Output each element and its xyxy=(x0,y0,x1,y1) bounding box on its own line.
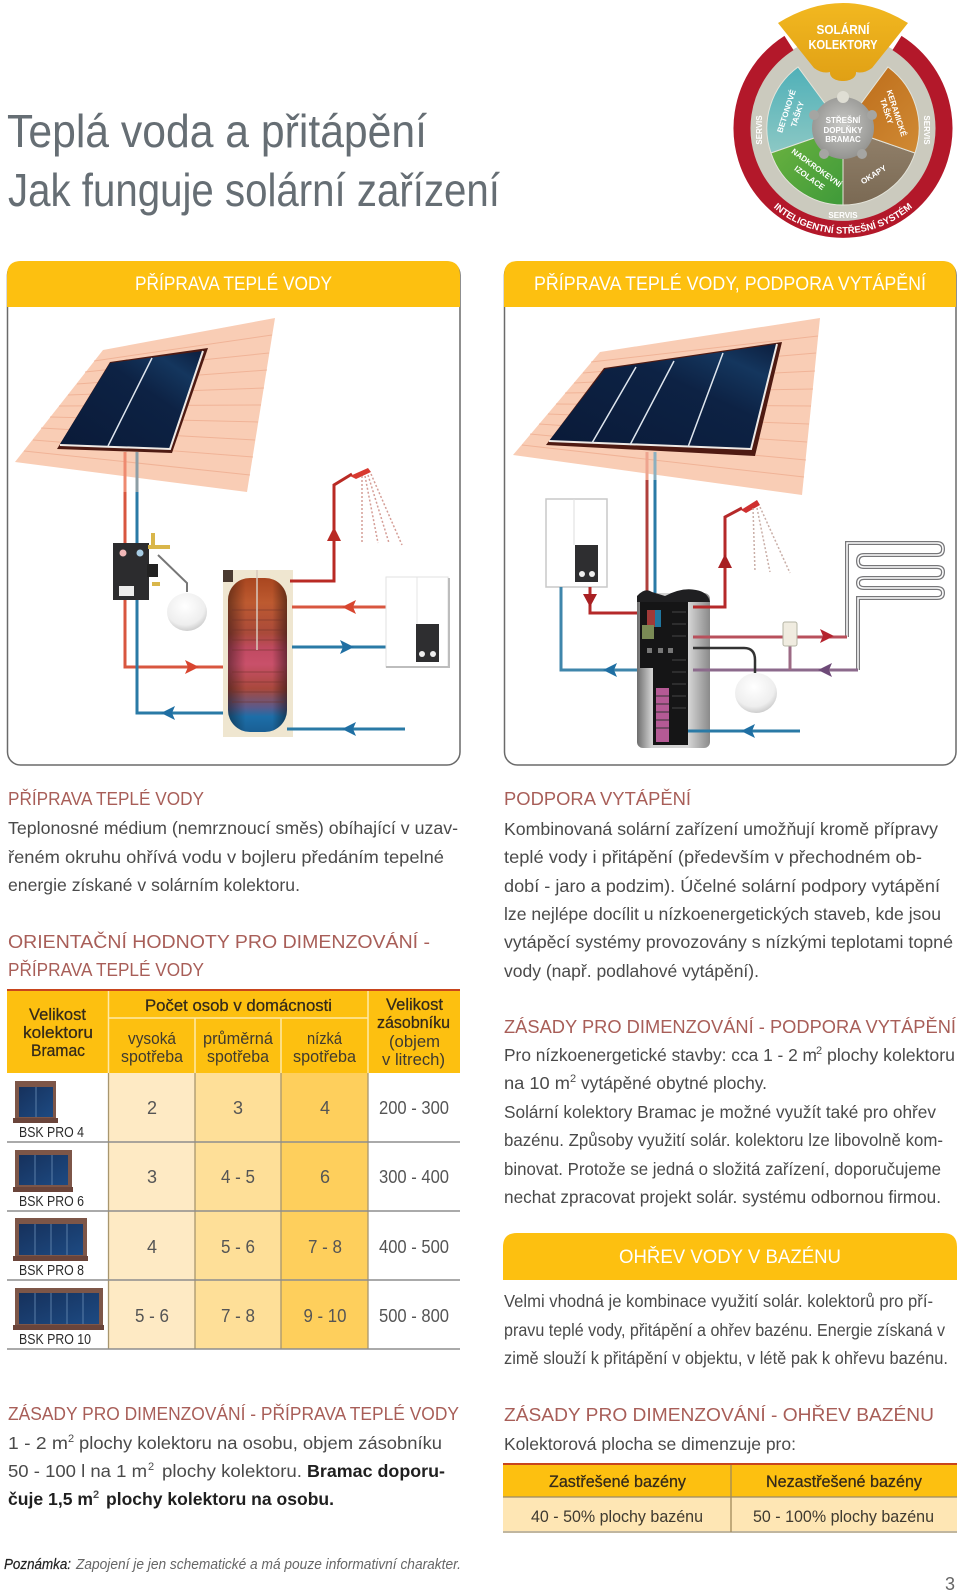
boiler connection pipes xyxy=(287,600,405,736)
banner: ohřev vody v bazénu xyxy=(503,1233,957,1280)
shower pipe and head xyxy=(693,500,790,607)
text block: příprava teplé vody: Teplonosné médium (nemrznoucí směs) obíhající v uzav- xyxy=(8,818,458,838)
row: BSK PRO 6: BSK PRO 6 xyxy=(19,1194,84,1210)
table header: kolektoru xyxy=(23,1024,93,1042)
table header: spotřeba xyxy=(207,1048,270,1066)
wall boiler xyxy=(386,577,449,667)
text block: zásady podpora vytápění: Solární kolektory Bramac je možné využít také pro ohřev xyxy=(504,1102,936,1122)
table column fills xyxy=(7,1073,460,1349)
text block: podpora vytápění: PODPORA VYTÁPĚNÍ xyxy=(504,789,691,809)
table header: nízká xyxy=(307,1030,343,1048)
row: BSK PRO 8 xyxy=(13,1218,449,1279)
table header xyxy=(7,989,460,1073)
table header: vysoká xyxy=(128,1030,177,1048)
text block: zásady příprava teplé vody: 2 xyxy=(148,1461,154,1473)
text block: příprava teplé vody: energie získané v solárním kolektoru. xyxy=(8,875,300,895)
combined tank xyxy=(637,589,710,748)
arrow: return from tank xyxy=(161,706,175,720)
table header: v litrech) xyxy=(382,1051,445,1069)
text block: příprava teplé vody: řeném okruhu ohřívá vodu v bojleru předáním tepelné xyxy=(8,847,444,867)
expansion vessel xyxy=(158,555,207,631)
emblem: intelligent roof system wheel xyxy=(733,3,953,238)
text block: zásady příprava teplé vody: 2 xyxy=(68,1433,74,1445)
sector: keramické tašky: KERAMICKÉ xyxy=(885,89,908,138)
title xyxy=(7,105,500,216)
text block: zásady podpora vytápění: 2 xyxy=(570,1073,576,1085)
text block: příprava teplé vody xyxy=(8,789,458,895)
roof with collector xyxy=(513,318,820,495)
panel heading: PŘÍPRAVA TEPLÉ VODY, PODPORA VYTÁPĚNÍ xyxy=(534,273,927,295)
text block: příprava teplé vody: PŘÍPRAVA TEPLÉ VODY xyxy=(8,789,204,809)
table header: spotřeba xyxy=(293,1048,357,1066)
note: Zapojení je jen schematické a má pouze informativní charakter. xyxy=(75,1556,461,1573)
heading: orientační hodnoty: ORIENTAČNÍ HODNOTY PRO DIMENZOVÁNÍ - xyxy=(8,931,430,952)
sector: keramické tašky: TAŠKY xyxy=(878,97,895,126)
row: BSK PRO 10: 7 - 8 xyxy=(221,1306,255,1326)
table header: Počet osob v domácnosti xyxy=(145,997,332,1015)
roof with collector xyxy=(15,318,275,492)
row: BSK PRO 4: 200 - 300 xyxy=(379,1098,449,1118)
row: BSK PRO 6: 6 xyxy=(320,1167,330,1187)
row: BSK PRO 4: 2 xyxy=(147,1098,157,1118)
yellow piece: solární kolektory: SOLÁRNÍ xyxy=(816,22,870,37)
panel heading xyxy=(504,261,956,307)
text block: zásady podpora vytápění: 2 xyxy=(816,1045,822,1057)
row: BSK PRO 8: 4 xyxy=(147,1237,157,1257)
sector: betonové tašky xyxy=(767,67,843,153)
row: BSK PRO 6: 4 - 5 xyxy=(221,1167,255,1187)
text block: zásady příprava teplé vody xyxy=(8,1404,459,1509)
shower pipe and head xyxy=(290,468,402,581)
cold water inlet xyxy=(688,724,800,738)
text block: zásady příprava teplé vody: Bramac doporu- xyxy=(307,1461,445,1481)
sector: nadkrokevní izolace: NADKROKEVNÍ xyxy=(790,147,844,190)
row: BSK PRO 10 xyxy=(13,1288,449,1348)
text block: zásady příprava teplé vody: 2 xyxy=(93,1489,99,1501)
text block: zásady příprava teplé vody: 1 - 2 m xyxy=(8,1433,68,1453)
text block: ohřev bazénu: Velmi vhodná je kombinace využití solár. kolektorů pro pří- xyxy=(504,1291,933,1311)
row: BSK PRO 8: 400 - 500 xyxy=(379,1237,449,1257)
text block: zásady příprava teplé vody: čuje 1,5 m xyxy=(8,1489,93,1509)
panel heading xyxy=(7,261,460,307)
table header: spotřeba xyxy=(121,1048,184,1066)
boiler pipes xyxy=(561,587,640,677)
row: BSK PRO 10: BSK PRO 10 xyxy=(19,1332,91,1348)
table header: průměrná xyxy=(203,1030,274,1048)
sector: okapy xyxy=(843,128,915,205)
heading: orientační hodnoty: PŘÍPRAVA TEPLÉ VODY xyxy=(8,960,204,980)
central puzzle: střešní doplňky: DOPLŇKY xyxy=(823,126,863,135)
text block: zásady podpora vytápění xyxy=(504,1017,956,1207)
row: BSK PRO 10: 9 - 10 xyxy=(304,1306,346,1326)
service labels: SERVIS xyxy=(755,115,764,145)
text block: zásady příprava teplé vody: plochy kolektoru na osobu, objem zásobníku xyxy=(79,1433,442,1453)
storage tank xyxy=(223,570,293,737)
table header: Bramac xyxy=(31,1042,85,1060)
solar circuit pipes xyxy=(647,452,655,630)
sector: nadkrokevní izolace: IZOLACE xyxy=(793,164,827,192)
table: bazény xyxy=(503,1463,957,1532)
central puzzle: střešní doplňky xyxy=(809,91,877,159)
table header: Velikost xyxy=(29,1006,86,1024)
sector: betonové tašky: TAŠKY xyxy=(789,100,806,128)
service labels: SERVIS xyxy=(828,211,858,220)
text block: podpora vytápění: vytápěcí systémy provozovány s nízkými teplotami topné xyxy=(504,932,953,952)
text block: podpora vytápění xyxy=(504,789,953,981)
text block: zásady ohřev bazénu: ZÁSADY PRO DIMENZOVÁNÍ - OHŘEV BAZÉNU xyxy=(504,1405,934,1425)
sector: betonové tašky: BETONOVÉ xyxy=(775,88,798,134)
banner: ohřev vody v bazénu: OHŘEV VODY V BAZÉNU xyxy=(619,1246,841,1268)
table header: zásobníku xyxy=(377,1014,450,1032)
yellow piece: solární kolektory: KOLEKTORY xyxy=(808,38,878,52)
row: BSK PRO 10: 500 - 800 xyxy=(379,1306,449,1326)
row: BSK PRO 4: 3 xyxy=(233,1098,243,1118)
row: BSK PRO 8: BSK PRO 8 xyxy=(19,1263,84,1279)
row: BSK PRO 8: 5 - 6 xyxy=(221,1237,255,1257)
panel: příprava teplé vody, podpora vytápění xyxy=(504,261,956,765)
row: BSK PRO 8: 7 - 8 xyxy=(308,1237,342,1257)
row: BSK PRO 6 xyxy=(13,1150,449,1210)
table: dimenzování xyxy=(7,989,460,1349)
text block: zásady ohřev bazénu: Kolektorová plocha se dimenzuje pro: xyxy=(504,1434,796,1454)
sector: okapy: OKAPY xyxy=(859,163,889,186)
central puzzle: střešní doplňky: STŘEŠNÍ xyxy=(826,116,861,125)
table header: Velikost xyxy=(386,996,443,1014)
solar circuit pipes xyxy=(125,452,227,713)
table: bazény: Zastřešené bazény xyxy=(549,1473,687,1491)
row: BSK PRO 10: 5 - 6 xyxy=(135,1306,169,1326)
text block: podpora vytápění: vody (např. podlahové vytápění). xyxy=(504,961,759,981)
sector: nadkrokevní izolace xyxy=(771,128,844,205)
text block: zásady ohřev bazénu xyxy=(504,1405,934,1454)
text block: zásady příprava teplé vody: plochy kolektoru. xyxy=(162,1461,302,1481)
underfloor heating loop xyxy=(847,543,943,670)
service labels xyxy=(755,115,931,220)
wall boiler xyxy=(546,499,607,587)
text block: zásady podpora vytápění: ZÁSADY PRO DIMENZOVÁNÍ - PODPORA VYTÁPĚNÍ xyxy=(504,1017,956,1037)
row: BSK PRO 6: 3 xyxy=(147,1167,157,1187)
solar pump station xyxy=(113,533,170,600)
text block: zásady podpora vytápění: bazénu. Způsoby využití solár. kolektoru lze libovolně kom- xyxy=(504,1130,943,1150)
service labels: SERVIS xyxy=(922,115,931,145)
text block: zásady podpora vytápění: vytápěné obytné plochy. xyxy=(581,1073,767,1093)
text block: zásady podpora vytápění: Pro nízkoenergetické stavby: cca 1 - 2 m xyxy=(504,1045,817,1065)
panel heading: PŘÍPRAVA TEPLÉ VODY xyxy=(135,273,332,295)
text block: podpora vytápění: Kombinovaná solární zařízení umožňují kromě přípravy xyxy=(504,819,938,839)
text block: zásady příprava teplé vody: ZÁSADY PRO DIMENZOVÁNÍ - PŘÍPRAVA TEPLÉ VODY xyxy=(8,1404,459,1424)
heating circuit pipes xyxy=(693,622,858,677)
yellow piece: solární kolektory xyxy=(778,3,908,81)
table header: (objem xyxy=(389,1033,440,1051)
text block: zásady podpora vytápění: nechat zpracovat projekt solár. systému odbornou firmou. xyxy=(504,1187,941,1207)
heading: orientační hodnoty xyxy=(8,931,430,980)
text block: zásady podpora vytápění: plochy kolektoru xyxy=(827,1045,955,1065)
title: Teplá voda a přitápění xyxy=(7,105,427,157)
table: bazény: Nezastřešené bazény xyxy=(766,1473,923,1491)
row: BSK PRO 6: 300 - 400 xyxy=(379,1167,449,1187)
note: Poznámka: xyxy=(4,1556,71,1573)
text block: zásady příprava teplé vody: 50 - 100 l na 1 m xyxy=(8,1461,147,1481)
text block: podpora vytápění: dobí - jaro a podzim). Účelné solární podpory vytápění xyxy=(504,875,940,896)
row: BSK PRO 4 xyxy=(13,1081,449,1141)
text block: zásady podpora vytápění: binovat. Protože se jedná o složitá zařízení, doporučujeme xyxy=(504,1159,941,1179)
panel: příprava teplé vody xyxy=(7,261,460,765)
text block: podpora vytápění: teplé vody i přitápění (především v přechodném ob- xyxy=(504,847,922,867)
table: bazény: 50 - 100% plochy bazénu xyxy=(753,1508,934,1526)
arrow: flow to tank xyxy=(185,660,199,674)
red outer ring xyxy=(742,43,944,229)
title: Jak funguje solární zařízení xyxy=(8,164,500,216)
central puzzle: střešní doplňky: BRAMAC xyxy=(825,135,861,144)
text block: ohřev bazénu xyxy=(504,1291,948,1368)
panel frame xyxy=(8,262,460,765)
row: BSK PRO 4: BSK PRO 4 xyxy=(19,1125,84,1141)
expansion vessel xyxy=(693,648,777,713)
table: bazény: 40 - 50% plochy bazénu xyxy=(531,1508,703,1526)
text block: podpora vytápění: lze nejlépe docílit u nízkoenergetických staveb, kde jsou xyxy=(504,904,941,924)
text block: zásady podpora vytápění: na 10 m xyxy=(504,1073,570,1093)
ring caption: INTELIGENTNÍ STŘEŠNÍ SYSTÉM xyxy=(774,202,912,234)
row: BSK PRO 4: 4 xyxy=(320,1098,330,1118)
text block: zásady příprava teplé vody: plochy kolektoru na osobu. xyxy=(106,1489,334,1509)
sector: keramické tašky xyxy=(843,67,919,153)
panel frame xyxy=(504,262,956,765)
